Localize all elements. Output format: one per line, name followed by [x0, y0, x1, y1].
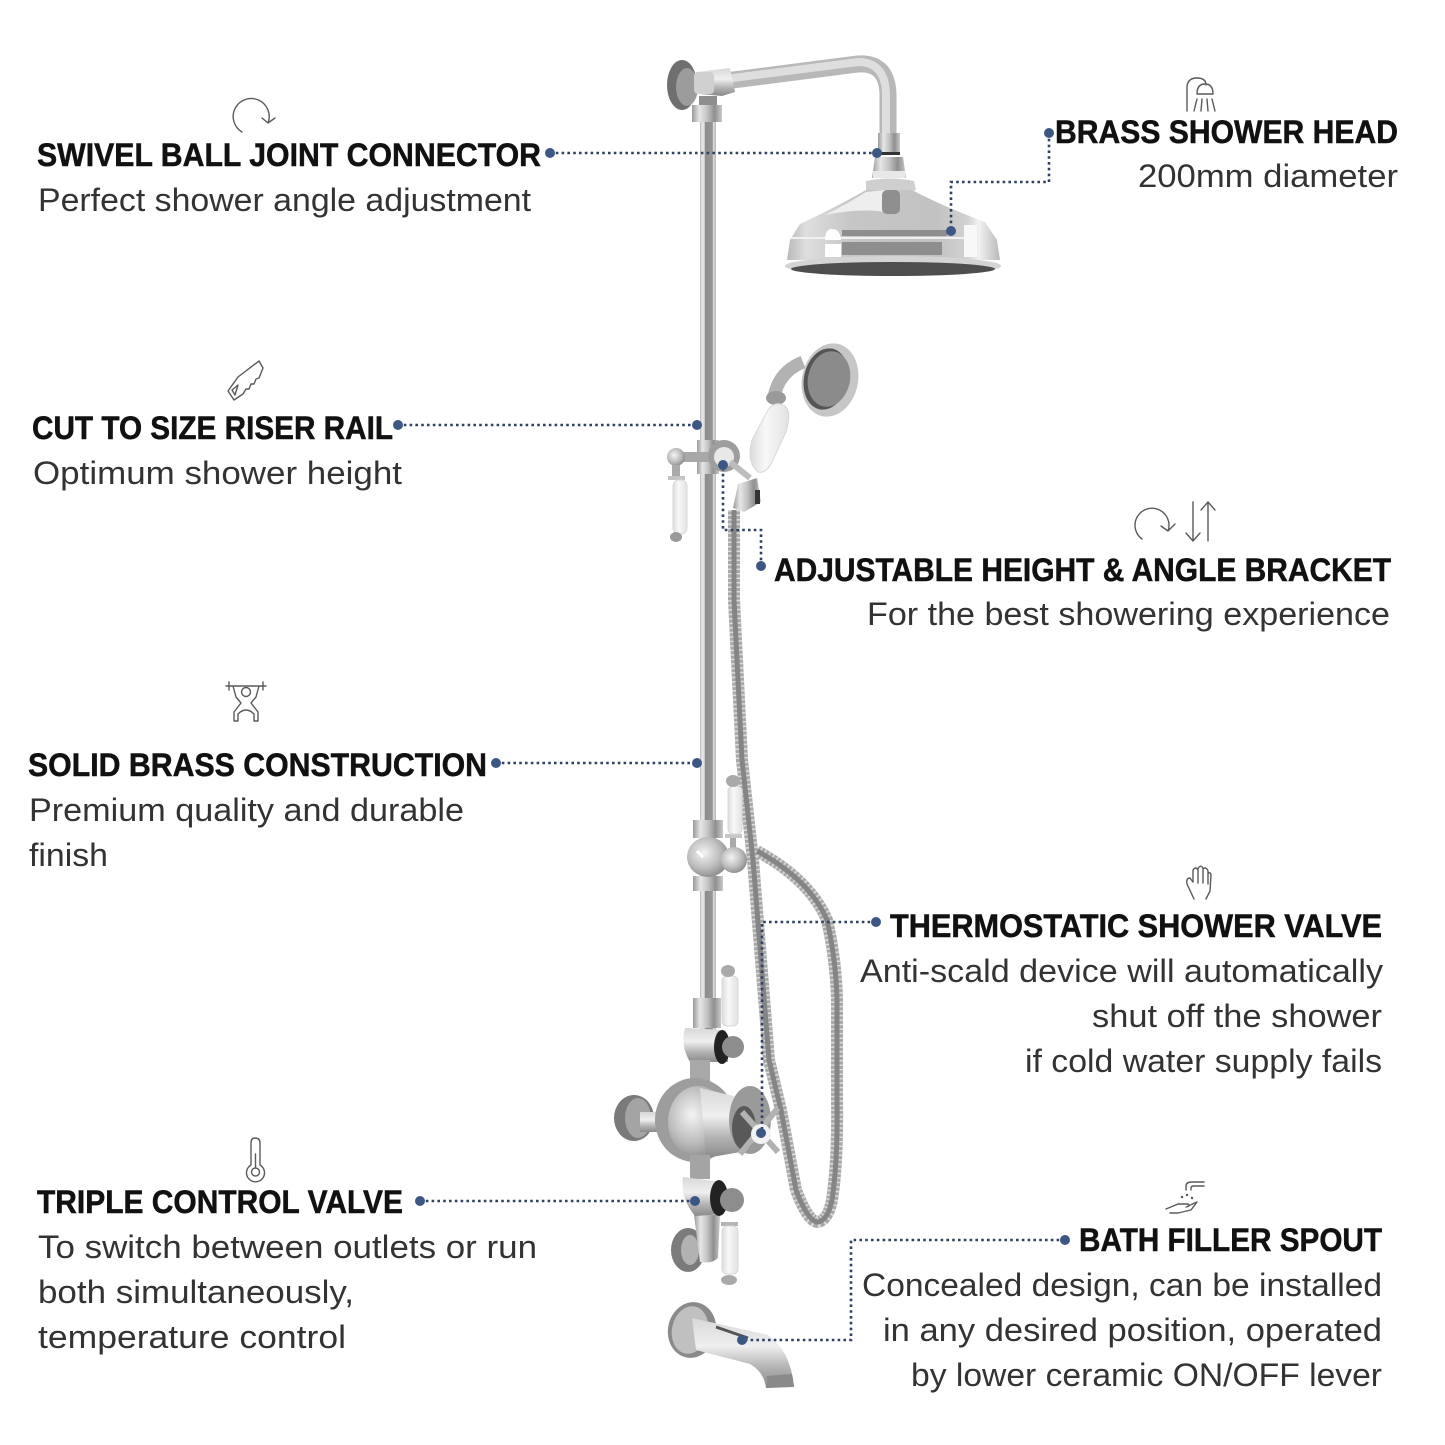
icon: rotate arrow — [233, 99, 275, 132]
diverter valve — [687, 775, 747, 891]
description: if cold water supply fails — [1025, 1043, 1382, 1079]
icon: shower — [1187, 78, 1215, 111]
description: temperature control — [38, 1319, 346, 1355]
shower rail — [700, 118, 716, 1030]
description: Perfect shower angle adjustment — [38, 182, 531, 218]
description — [860, 953, 1383, 1079]
callout: triple control valve — [37, 1138, 700, 1355]
description: Anti-scald device will automatically — [860, 953, 1383, 989]
icon: saw — [228, 361, 263, 400]
shower arm and wall mount — [667, 60, 888, 134]
callout: cut to size riser rail — [32, 361, 702, 491]
description: finish — [29, 837, 108, 873]
callout: thermostatic shower valve — [756, 866, 1383, 1138]
leader line — [545, 148, 882, 158]
product: shower set illustration — [614, 60, 1001, 1388]
description: 200mm diameter — [1138, 158, 1398, 194]
leader line — [491, 758, 702, 768]
rain shower head — [785, 133, 1001, 276]
icon: weightlifter — [226, 682, 266, 721]
heading: ADJUSTABLE HEIGHT & ANGLE BRACKET — [774, 552, 1391, 588]
description: shut off the shower — [1092, 998, 1382, 1034]
flexible hose — [734, 510, 837, 1222]
description — [29, 792, 464, 873]
leader line — [415, 1196, 700, 1206]
icon: thermometer — [246, 1138, 264, 1182]
icon: hands under tap — [1166, 1182, 1204, 1213]
description: Optimum shower height — [33, 455, 402, 491]
callout: solid brass construction — [28, 682, 702, 873]
description: For the best showering experience — [867, 596, 1390, 632]
sliding bracket and upper lever — [667, 440, 761, 542]
leader line — [946, 128, 1054, 236]
heading: SWIVEL BALL JOINT CONNECTOR — [37, 137, 541, 173]
description — [38, 1229, 537, 1355]
callout: bath filler spout — [737, 1182, 1382, 1393]
description: To switch between outlets or run — [38, 1229, 537, 1265]
thermostatic valve body — [614, 1078, 778, 1162]
leader line — [756, 917, 881, 1138]
upper valve with lever — [683, 965, 744, 1082]
lower control valve and wall mount — [671, 1155, 744, 1285]
callout: swivel ball joint connector — [37, 99, 882, 218]
heading: THERMOSTATIC SHOWER VALVE — [890, 908, 1382, 944]
description: in any desired position, operated — [883, 1312, 1382, 1348]
heading: BATH FILLER SPOUT — [1079, 1222, 1382, 1258]
bath filler spout — [663, 1298, 794, 1388]
heading: CUT TO SIZE RISER RAIL — [32, 410, 393, 446]
description: both simultaneously, — [38, 1274, 354, 1310]
icon: rotate and height arrows — [1135, 502, 1215, 541]
description: by lower ceramic ON/OFF lever — [911, 1357, 1382, 1393]
description: Premium quality and durable — [29, 792, 464, 828]
callout: adjustable height and angle bracket — [718, 460, 1391, 632]
leader line — [393, 420, 702, 430]
description: Concealed design, can be installed — [862, 1267, 1382, 1303]
description — [862, 1267, 1382, 1393]
icon: hand — [1187, 866, 1211, 899]
hand shower — [750, 338, 865, 472]
heading: SOLID BRASS CONSTRUCTION — [28, 747, 487, 783]
leader line — [718, 460, 766, 571]
heading: TRIPLE CONTROL VALVE — [37, 1184, 403, 1220]
callout: brass shower head — [946, 78, 1398, 236]
leader line — [737, 1235, 1070, 1345]
heading: BRASS SHOWER HEAD — [1055, 114, 1398, 150]
